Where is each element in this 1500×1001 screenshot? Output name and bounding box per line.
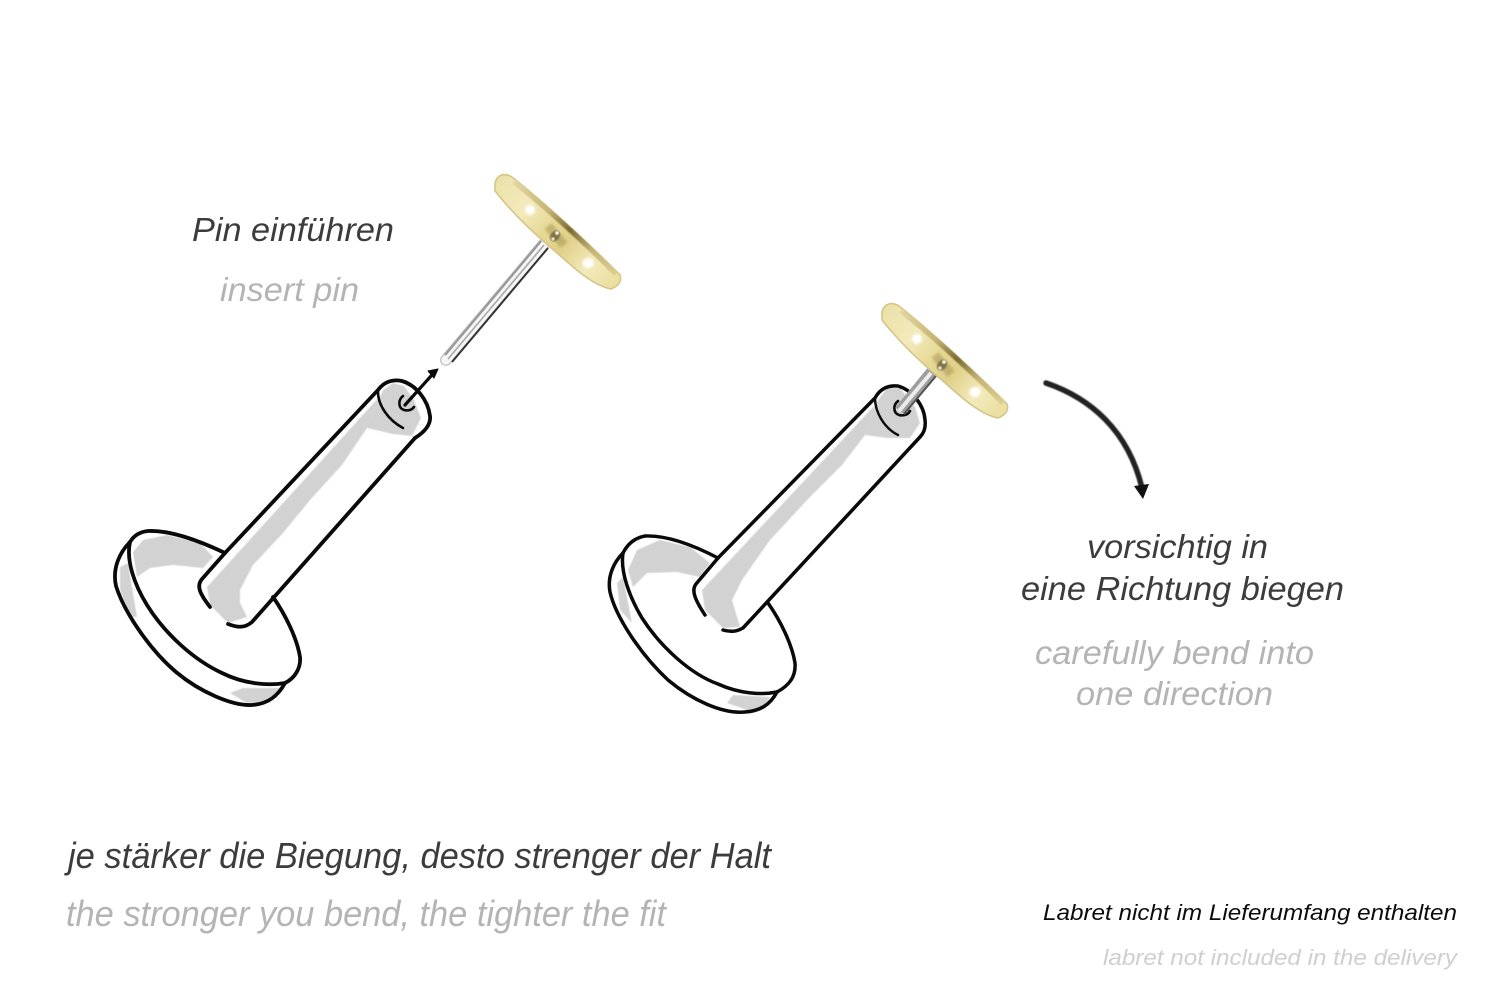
pin and gold disc: top left — [445, 175, 621, 362]
shaft outline: right — [694, 386, 925, 631]
text: insert pin heading: insert pin — [220, 271, 359, 308]
text: delivery note: labret not included in the delivery — [1103, 945, 1459, 970]
text: bend direction: one direction — [1076, 675, 1273, 712]
text: bend strength note: je stärker die Biegung, desto strenger der Halt — [63, 835, 773, 876]
text: bend direction: vorsichtig in — [1087, 528, 1268, 565]
labret illustration: right — [609, 386, 925, 712]
text: delivery note — [1043, 900, 1459, 970]
disc outline: left — [115, 531, 300, 705]
text: bend direction: carefully bend into — [1035, 634, 1314, 671]
text: bend strength note: the stronger you bend, the tighter the fit — [66, 893, 668, 934]
disc outline: right — [609, 536, 795, 712]
shaft outline: left — [199, 380, 430, 627]
gold disc — [882, 304, 1008, 418]
pin — [899, 372, 936, 414]
shading: right labret — [617, 388, 920, 710]
hole and small arrow — [399, 369, 438, 410]
pin and gold disc: top right — [882, 304, 1008, 418]
arrow: bend direction — [1046, 383, 1149, 499]
gold disc — [495, 175, 621, 289]
text: insert pin heading: Pin einführen — [192, 211, 394, 248]
text: bend direction — [1021, 528, 1344, 712]
pin — [445, 241, 548, 362]
text: delivery note: Labret nicht im Lieferumfang enthalten — [1043, 900, 1457, 925]
hole: right labret — [894, 401, 910, 415]
text: insert pin heading — [192, 211, 394, 308]
labret illustration: left — [115, 369, 438, 705]
shading: left labret — [120, 383, 421, 703]
text: bend direction: eine Richtung biegen — [1021, 570, 1344, 607]
text: bend strength note — [63, 835, 773, 934]
